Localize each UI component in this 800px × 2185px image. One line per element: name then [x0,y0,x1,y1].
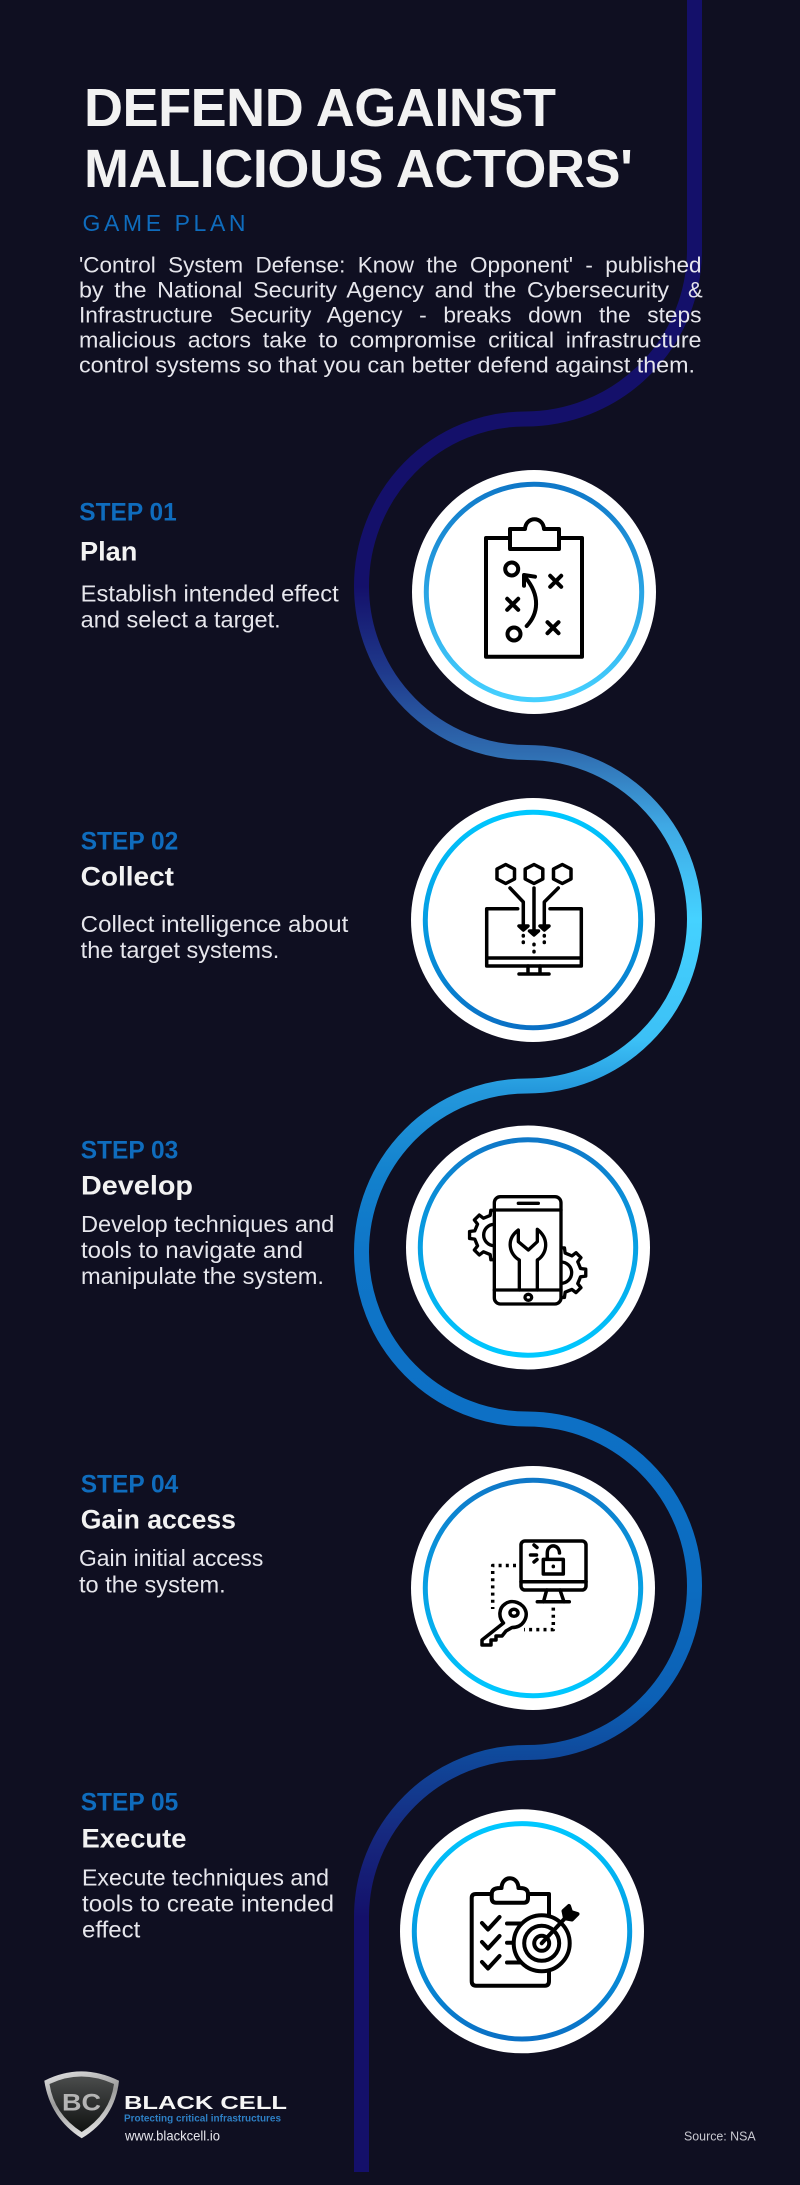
icon: clipboard play plan [486,519,582,657]
panel: step 04 icon circle [411,1466,655,1710]
subtitle: game plan: GAME PLAN [82,210,250,236]
logo: black cell [44,2071,287,2143]
intro paragraph: by the National Security Agency and the Cybersecurity [79,278,669,302]
step 02 description [81,911,349,963]
panel: step 03 develop [81,1137,334,1289]
step 05 label: STEP 05 [81,1789,178,1817]
logo: black cell: Protecting critical infrastructures [124,2113,281,2125]
intro paragraph [79,252,703,378]
step 03 description: Develop techniques and [81,1211,334,1237]
step 01 name: Plan [80,537,137,567]
step 02 name: Collect [81,861,174,891]
step 05 description [82,1865,334,1943]
step 03 name: Develop [81,1171,193,1201]
title: MALICIOUS ACTORS' [84,139,633,199]
icon: monitor collecting data [487,864,581,974]
title: DEFEND AGAINST [84,78,556,138]
step 03 description: tools to navigate and [81,1237,303,1263]
intro paragraph: malicious actors take to compromise critical infrastructure [79,328,702,352]
icon: shield with BC [44,2071,119,2138]
step 04 description [79,1545,263,1597]
step 04 description: to the system. [79,1571,226,1597]
intro paragraph: 'Control System Defense: Know the Opponent' - published [79,252,702,278]
panel: step 02 collect [81,827,349,963]
panel: step 05 icon circle [400,1809,644,2053]
step 03 label: STEP 03 [81,1137,178,1165]
step 04 label: STEP 04 [81,1471,178,1499]
panel: step 05 execute [81,1789,334,1943]
step 04 name: Gain access [81,1505,236,1535]
step 01 description: and select a target. [81,607,281,633]
step 01 description: Establish intended effect [81,581,339,607]
logo: black cell: BLACK CELL [124,2092,287,2113]
panel: step 04 gain access [79,1471,263,1597]
step 05 description: tools to create intended [82,1891,334,1917]
winding gradient path [362,0,694,2172]
step 02 description: Collect intelligence about [81,911,349,937]
panel: step 02 icon circle [411,798,655,1042]
icon: shield with BC: BC [62,2090,101,2116]
step 01 label: STEP 01 [79,499,177,527]
title [84,78,633,199]
icon: key unlocking monitor [482,1541,586,1645]
source note: Source: NSA [684,2129,756,2144]
panel: step 01 icon circle [412,470,656,714]
step 01 description [81,581,339,633]
icon: checklist with target [472,1878,578,1986]
intro paragraph: Infrastructure Security Agency - breaks down the steps [79,302,702,328]
panel: step 03 icon circle [406,1126,650,1370]
step 05 name: Execute [82,1823,186,1853]
intro paragraph: control systems so that you can better defend against them. [79,352,695,378]
panel: step 01 plan [79,499,339,633]
icon: phone with wrench and gears [470,1197,586,1304]
step 05 description: Execute techniques and [82,1865,329,1891]
step 03 description [81,1211,334,1289]
step 02 description: the target systems. [81,937,279,963]
logo: black cell: www.blackcell.io [124,2128,220,2143]
step 05 description: effect [82,1917,141,1943]
step 03 description: manipulate the system. [81,1263,324,1289]
step 02 label: STEP 02 [81,827,178,855]
step 04 description: Gain initial access [79,1545,263,1571]
intro paragraph: & [688,278,703,302]
